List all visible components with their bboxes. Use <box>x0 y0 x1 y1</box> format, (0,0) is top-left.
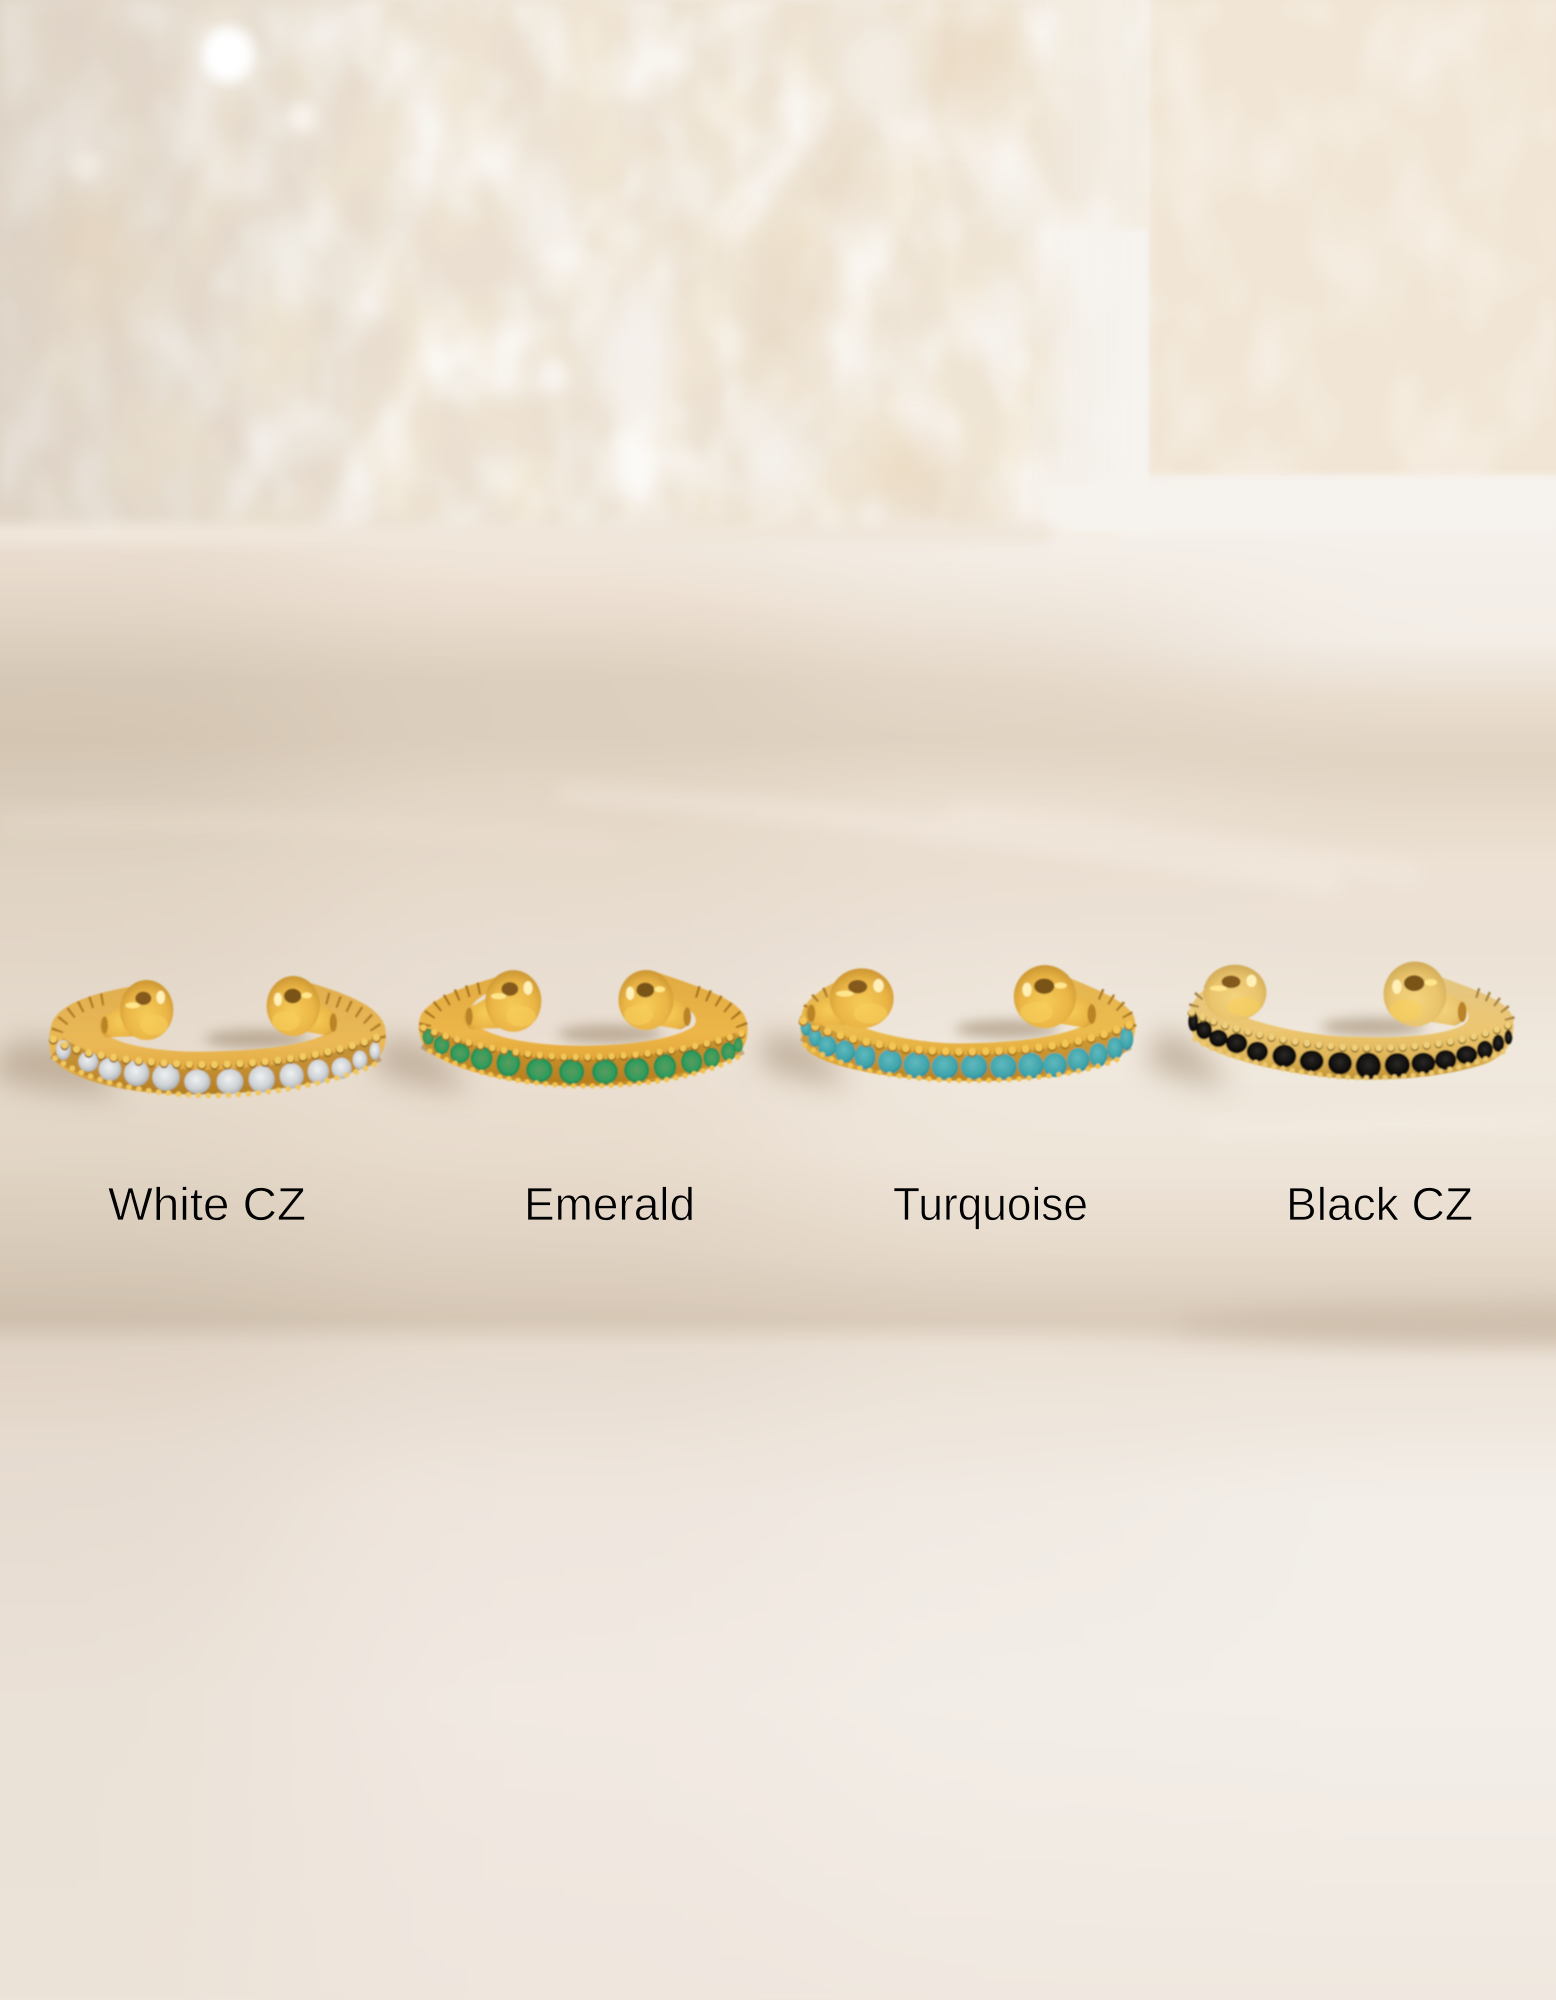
pale marble mottling <box>0 0 1150 536</box>
ear cuff: emerald <box>419 970 748 1086</box>
bokeh sparkles <box>73 27 648 393</box>
light streaks on floor <box>0 788 1556 1343</box>
ear cuff: white CZ <box>49 976 386 1096</box>
shadows beneath ear cuffs <box>0 1033 1230 1095</box>
gem row <box>801 1019 1133 1079</box>
label: Black CZ: Black CZ <box>1286 1178 1473 1230</box>
ear cuff: turquoise <box>800 965 1135 1081</box>
light vertical strip <box>1030 0 1150 530</box>
gem row <box>56 1040 380 1094</box>
tan marble veins <box>0 0 1150 536</box>
gem row <box>422 1029 743 1084</box>
soft transition from wall to floor <box>0 524 1050 544</box>
ear cuff: black CZ <box>1188 962 1514 1079</box>
ball ends <box>100 976 337 1040</box>
label: White CZ: White CZ <box>108 1178 306 1230</box>
ball ends <box>464 970 691 1032</box>
label: Turquoise: Turquoise <box>893 1178 1088 1230</box>
ball ends <box>1204 962 1466 1026</box>
right wall panel <box>1150 0 1556 475</box>
gem row <box>1188 1012 1512 1079</box>
label: Emerald: Emerald <box>524 1178 695 1230</box>
ball ends <box>805 965 1096 1028</box>
marble wall <box>0 0 1556 544</box>
shadows inside ear cuff openings <box>205 1018 1425 1048</box>
